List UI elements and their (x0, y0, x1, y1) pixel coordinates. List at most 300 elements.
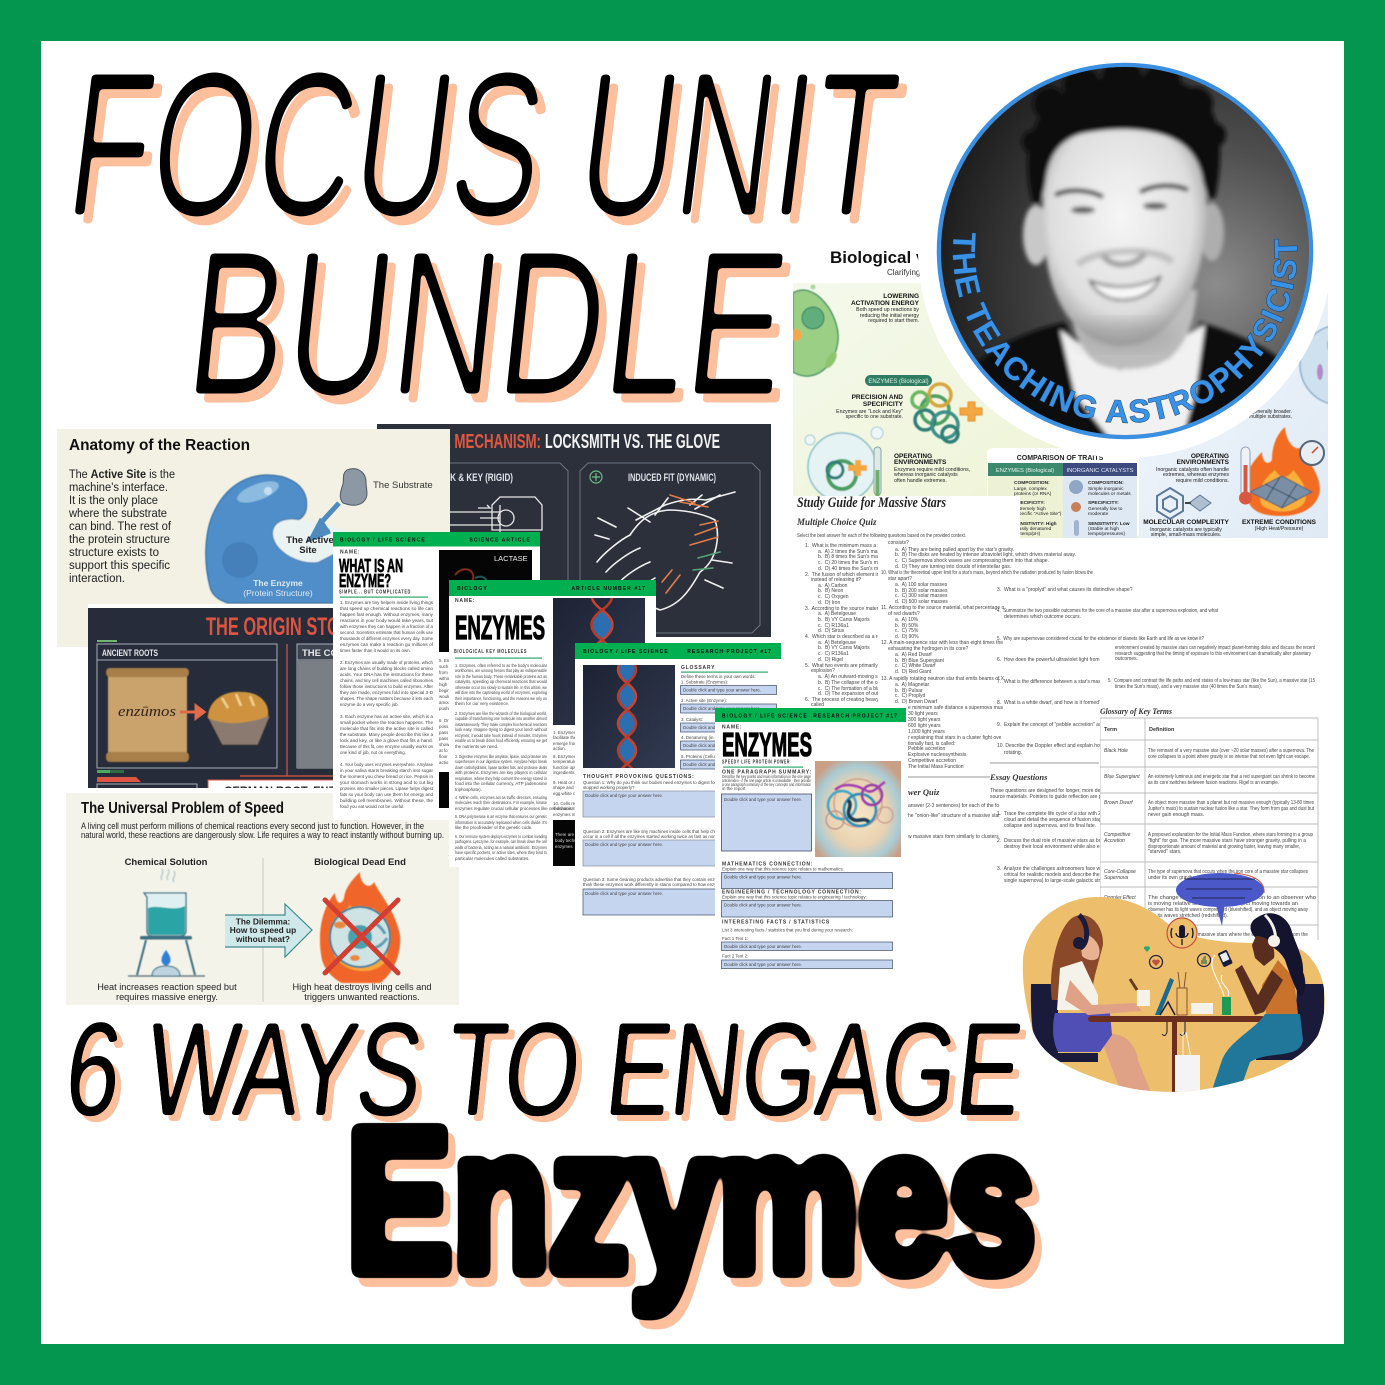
title: FOCUS UNIT: FOCUS UNIT (65, 39, 918, 268)
quiz column 1: c. C) Oxygen (818, 594, 849, 600)
panel: the mechanism locksmith vs the glove (377, 424, 771, 637)
label: extreme conditions: EXTREME CONDITIONS (1242, 519, 1317, 526)
label: molecular complexity (1143, 519, 1229, 538)
image: dna helix (583, 665, 675, 768)
short answer and essay column: 3. What is a "proplyd" and what causes its distinctive shape? (997, 587, 1133, 593)
box: ancient roots: ANCIENT ROOTS (102, 648, 158, 659)
text: operating environments left: often handle extremes. (894, 478, 947, 484)
body text: It is the only place (69, 493, 158, 507)
heading: THE MECHANISM: (424, 431, 541, 453)
table: glossary of key terms: A proposed explanation for the Initial Mass Function, where stars forming in a group (1148, 832, 1313, 838)
second column stub: at fo (439, 748, 448, 753)
summary instructions (722, 774, 811, 791)
quiz column 1: b. B) VY Canis Majoris (818, 645, 870, 651)
header bar (575, 643, 781, 659)
heading: THE ORIGIN STORY (206, 613, 362, 641)
quiz column 2: d. D) 500 solar masses (895, 599, 948, 605)
quiz column 1 (805, 543, 878, 706)
quiz column 2: b. B) 50% (895, 623, 919, 629)
second column stub: temperature and (553, 759, 586, 764)
body text: 4. Your body uses enzymes everywhere. Amylase (340, 762, 434, 767)
body text: interaction. (69, 571, 125, 585)
second column stub: poss (439, 724, 449, 729)
icon: heart badge (1150, 956, 1162, 968)
icon: bread loaf (207, 692, 270, 745)
short answer and essay column: 4. Summarize the two possible outcomes for the core of a massive star after a supernova explosion, and what (997, 608, 1219, 614)
icon: green plus badge (590, 471, 602, 483)
second column stub (439, 658, 451, 765)
summary instructions: in the report (722, 786, 746, 791)
body text: will dive into the captivating world of enzymes, exploring (455, 690, 547, 695)
header bar: ARTICLE NUMBER #17 (571, 586, 646, 592)
body text: second. Scientists estimate that human cells use (340, 630, 434, 635)
right woman face (1252, 936, 1274, 966)
body text: walls of bacteria, acting as a natural antibiotic. Enzymes (455, 845, 548, 850)
label: enzumos: enzūmos (118, 704, 176, 720)
question 3: Question 3: Some cleaning products advertise that they contain enzymes to help them (583, 877, 751, 882)
label: the enzyme: The Enzyme (253, 578, 303, 588)
title: WHAT IS AN (339, 556, 403, 576)
panel: biological vs inorganic catalysts infographic (793, 251, 1328, 538)
question 1: stopped working properly? (583, 785, 635, 790)
table: glossary of key terms: Term (1104, 727, 1117, 733)
short answer and essay column: collapse and supernova, and its final fate. (1004, 823, 1096, 829)
panel: anatomy of the reaction (57, 429, 450, 647)
label: molecular complexity: Inorganic catalysts are typically (1150, 527, 1222, 533)
summary answer box: Double click and type your answer here. (724, 797, 802, 802)
glossary inputs: 5. Proteins (Cellular): (681, 754, 722, 759)
second column stub: 10. Cells regula (553, 801, 584, 806)
short answer and essay column (989, 587, 1219, 884)
table: glossary of key terms: Doppler Effect (1104, 895, 1136, 901)
quiz column 2: e minimum safe distance a supernova mus (908, 705, 1004, 711)
short answer and essay column: 8. What is a white dwarf, and how is it formed? (997, 700, 1102, 706)
table: glossary of key terms: A region in space near massive stars where the extreme radiation from the (1148, 932, 1308, 938)
subtitle: 6 ways to engage: 6 WAYS TO ENGAGE (65, 1001, 1036, 1150)
question 1 (583, 780, 781, 817)
image: lactase: LACTASE (494, 554, 528, 563)
panel: comparison of traits: Simple inorganic (1088, 486, 1124, 492)
text: lowering activation energy: LOWERING (883, 293, 919, 300)
quiz column 2: consists? (888, 540, 909, 546)
quiz column 2: Pebble accretion (908, 746, 945, 752)
quiz column 1: 5. What two events are primarily res (805, 663, 887, 669)
intro text: A living cell must perform millions of chemical reactions every second just to function. However, in the (81, 821, 424, 831)
table: glossary of key terms: Brown Dwarf (1104, 800, 1133, 806)
coffee cup (1130, 979, 1150, 1006)
quiz column 2: a. A) 100 solar masses (895, 582, 948, 588)
decorative bar (97, 640, 117, 642)
quiz column 1: a. A) Carbon (818, 583, 848, 589)
heading (424, 431, 720, 453)
header bar (449, 580, 656, 596)
left woman arm (1065, 980, 1142, 1015)
icon: substrate (340, 469, 367, 505)
quiz column 1: 3. According to the source material, (805, 606, 885, 612)
subheading: multiple choice quiz: Multiple Choice Quiz (796, 517, 877, 527)
second column stub: shape and no (553, 785, 580, 790)
body text: thousands of different enzymes every day. Some (340, 636, 434, 641)
arrow: the dilemma: How to speed up (230, 925, 296, 935)
black callout box: There are (555, 832, 575, 837)
name label: NAME: (722, 724, 742, 730)
body text: shapes. The shape matters because it lets each (340, 696, 434, 701)
arrow (312, 503, 339, 538)
body text: enzyme do a very specific job. (340, 702, 399, 707)
panel: research project 17 glossary (575, 643, 781, 919)
quiz column 1: d. D) Rigel (818, 657, 843, 663)
interesting facts: Double click and type your answer here. (724, 962, 802, 967)
photo: portrait of a man in a dark suit (935, 59, 1315, 450)
body text: them for our very existence. (455, 701, 509, 706)
quiz column 1: b. B) The collapse of the core (818, 680, 885, 686)
quiz column 2: Competitive accretion (908, 758, 956, 764)
eyebrows (1055, 186, 1188, 197)
quiz column 2: 13. A rapidly rotating neutron star that emits beams of X (881, 676, 1005, 682)
panel: comparison of traits: Large, complex (1014, 486, 1047, 492)
quiz column 2: answer (2-3 sentences) for each of the fo (908, 803, 999, 809)
shirt (1060, 325, 1205, 445)
left woman hair back (1051, 915, 1103, 1000)
second column stub: pass (439, 736, 449, 741)
glossary inputs: 4. Denaturing (in biology): (681, 735, 731, 740)
title: FOCUS UNIT (57, 30, 918, 268)
quiz column 1: a. A) An outward-moving sho (818, 674, 884, 680)
glossary inputs: Double click and type your answer here. (683, 688, 761, 692)
box: ancient roots (97, 644, 277, 768)
text: precision and specificity (836, 394, 904, 420)
label: active site (286, 535, 334, 556)
quiz column 2: wer Quiz (908, 787, 940, 797)
quiz column 1: 1. What is the minimum mass a star needs (805, 543, 901, 549)
table: glossary of key terms: Jupiter's mass) to sustain nuclear fusion like a star. They form from gas and dust but (1148, 806, 1315, 812)
body text: enzymes regulate crucial cellular processes like cell division. (455, 806, 573, 811)
second column stub (553, 730, 586, 817)
box: second panel (296, 644, 333, 768)
caption right: triggers unwanted reactions. (304, 992, 420, 1002)
table pole (1172, 1020, 1177, 1095)
table: glossary of key terms: has its waves stretched (redshifted). (1148, 913, 1228, 919)
quiz column 1: b. B) Neon (818, 588, 844, 594)
panel: comparison of traits: (Stable at high (1088, 526, 1119, 532)
icon: thumbs up badge (1198, 954, 1210, 966)
body text: fats so your body can use them for energy and (340, 792, 434, 797)
header bar (715, 708, 906, 722)
table: glossary of key terms: Competitive (1104, 832, 1131, 838)
question 1: Question 1: Why do you think our bodies need enzymes to digest food? What would (583, 780, 747, 785)
table: glossary of key terms: The remnant of a very massive star (over ~20 solar masses) after a supernova. The (1148, 748, 1314, 754)
body text: support this specific (69, 558, 170, 572)
icon: parchment scroll (106, 668, 189, 762)
summary answer box (722, 794, 812, 851)
heading: Anatomy of the Reaction (69, 437, 250, 454)
divider (908, 696, 1220, 777)
table: glossary of key terms: "starved" stars. (1148, 849, 1182, 855)
second column stub: action. (553, 746, 566, 751)
short answer and essay column: cloud and detail the sequence of fusion stages t (1004, 817, 1110, 823)
quiz column 1: 6. The process of creating heavy ele (805, 697, 887, 703)
icon: green cell (790, 284, 839, 376)
body text: machine's interface. (69, 480, 168, 494)
panel: comparison of traits: SPECIFICITY: (1014, 500, 1045, 506)
earphone cable (1212, 955, 1229, 996)
body text: role in the human body. These remarkable proteins act as (455, 674, 548, 679)
quiz column 2: 11. According to the source material, what percentage o (881, 605, 1005, 611)
body text: capable of transforming one molecule into another almost (455, 716, 548, 721)
summary heading: ONE PARAGRAPH SUMMARY: (722, 770, 812, 776)
green rule (723, 766, 803, 768)
quiz column 1: 2. The fusion of which element in a star (805, 572, 894, 578)
arrow: the dilemma: The Dilemma: (236, 916, 290, 926)
body text: where the substrate (68, 506, 167, 520)
body text: food into the cellular currency, ATP (adenosine (455, 781, 548, 786)
quiz column 1: a. A) Betelgeuse (818, 611, 856, 617)
body text: that speed up chemical reactions so life can (340, 606, 434, 611)
icon: beaker on burner (128, 869, 205, 976)
short answer and essay column: source materials. Pointers to guide reflection are provid (990, 794, 1113, 800)
black callout box (553, 820, 577, 866)
short answer and essay column: determines which outcome occurs. (1004, 614, 1081, 620)
image: protein structure (815, 761, 901, 857)
text: lowering activation energy: reducing the initial energy (860, 313, 919, 319)
quiz column 2 (881, 540, 1093, 840)
quiz column 2: b. B) 200 solar masses (895, 588, 948, 594)
icon: bubble with enzyme (805, 427, 883, 501)
body text: building cell membranes. Without these, the (340, 798, 434, 803)
quiz column 2: The Initial Mass Function (908, 764, 964, 770)
table: glossary of key terms: under its own gravity. (1148, 875, 1195, 881)
title: FOCUS UNIT: FOCUS UNIT (57, 30, 910, 259)
speech bubble (1176, 873, 1264, 926)
panel: research project speedy life protein power (715, 708, 906, 973)
table: glossary of key terms: An extremely luminous and energetic star that a red supergiant can shrink to become (1148, 774, 1315, 780)
quiz column 1: b. B) VY Canis Majoris (818, 617, 870, 623)
short answer and essay column: 9. Explain the concept of "pebble accretion" as a n (997, 722, 1110, 728)
glossary inputs: 2. Active site (Enzyme): (681, 698, 727, 703)
second column stub: function optimal (553, 765, 584, 770)
panel: the origin story (88, 604, 333, 788)
left woman top (1057, 961, 1098, 1010)
table: glossary of key terms: The change in frequency of a wave in relation to an observer who (1148, 895, 1316, 901)
second column stub: facilitate the re (553, 735, 582, 740)
arrow: the dilemma: without heat? (235, 934, 290, 944)
body text: in your saliva starts breaking starch into sugar (340, 768, 434, 773)
second column stub: such (439, 664, 449, 669)
body text: instantaneously. They make complex biochemical reactions (455, 722, 548, 727)
smile (1090, 277, 1160, 300)
panel: comparison of traits: (Specific "Active Site") (1014, 511, 1062, 517)
glossary inputs: Double click and type your answer here. (683, 762, 761, 767)
black callout box: enzymes (555, 844, 573, 849)
body text: like the proofreader of the genetic code. (455, 825, 532, 830)
body text: chains, and tiny cell machines called ribosomes (340, 678, 434, 683)
body text: their importance, functioning, and the reasons we rely on (455, 696, 547, 701)
quiz column 1: 4. Which star is described as a red (805, 634, 883, 640)
body text: enable us to break down food efficiently, ensuring we get (455, 738, 548, 743)
quiz column 2: a. A) They are being pulled apart by the star's gravity. (895, 547, 1014, 553)
divider (262, 858, 264, 1002)
question 2: Question 2: Enzymes are like tiny machines inside cells that help chemical reactions (583, 829, 747, 834)
page four: top text and glossary heading (1100, 640, 1325, 940)
body text: workhorses, are unsung heroes that play an indispensable (455, 668, 547, 673)
title: BUNDLE: BUNDLE (177, 209, 798, 438)
quiz column 2: a. A) 10% (895, 617, 919, 623)
left headphones (1079, 915, 1087, 948)
quiz column 1: d. D) Sirius (818, 628, 845, 634)
headline: Enzymes: Enzymes (353, 1095, 1043, 1324)
second column stub: egg white chang (553, 791, 586, 796)
label: extreme conditions (1242, 520, 1316, 531)
arrow (180, 706, 204, 718)
engineering connection (722, 890, 892, 917)
body text: small pocket where the reaction happens. The (340, 720, 434, 725)
icon: thermometer (874, 447, 881, 496)
right headphones (1265, 915, 1280, 947)
body text: proteins into smaller pieces. Lipase helps digest (340, 786, 434, 791)
body text: Because of this fit, one enzyme usually works on (340, 744, 434, 749)
second column stub: 5. En (439, 658, 450, 663)
bar indicators (96, 770, 198, 788)
body text: 3. Each enzyme has an active site, which is a (340, 714, 434, 719)
question 2: Double click and type your answer here. (585, 842, 663, 847)
quiz column 2: c. C) 300 solar masses (895, 593, 948, 599)
second column stub: pass (439, 730, 449, 735)
interesting facts: Double click and type your answer here. (724, 944, 802, 949)
quiz column 2: star apart? (888, 576, 912, 582)
subtitle: BIOLOGICAL KEY MOLECULES (454, 649, 527, 655)
quiz column 2: d. D) Red Giant (895, 669, 932, 675)
instructions: Select the best answer for each of the following questions based on the provided context. (797, 533, 966, 539)
body text: triphosphate). (455, 787, 482, 792)
panel: comparison of traits: molecules or metals (1088, 491, 1131, 497)
glossary inputs: 3. Catalyst: (681, 717, 703, 722)
right woman shirt (1262, 960, 1298, 1014)
title: BUNDLE: BUNDLE (185, 218, 806, 447)
body text: the nutrients we need. (455, 744, 498, 749)
table: glossary of key terms: never gain enough mass. (1148, 812, 1204, 818)
body text: 6. Our immune system deploys enzymes to combat invading (455, 834, 547, 839)
header bar: BIOLOGY / LIFE SCIENCE (722, 714, 808, 720)
body text: 1. Enzymes, often referred to as the body's molecular (455, 663, 547, 668)
panel: comparison of traits: moderate (1088, 511, 1109, 517)
left chair (1031, 984, 1098, 1062)
right woman hair (1250, 913, 1305, 997)
second column stub: 8. Enzymes are (553, 754, 584, 759)
vase (1177, 972, 1187, 1015)
quiz column 2: exhausting the hydrogen in its core? (888, 646, 969, 652)
text: lowering activation energy: Both speed up reactions by (856, 307, 919, 313)
body text: times faster than it would on its own. (340, 648, 411, 653)
table: glossary of key terms: "fight" for gas. The more massive stars have stronger gravity, pulling in a (1148, 838, 1306, 844)
header bar: BIOLOGY (457, 586, 488, 592)
body text: lock and key, or like a glove that fits a hand. (340, 738, 433, 743)
heading: Biological vs. Inorganic Catalysts (830, 248, 1101, 267)
illustration: two people at a table with podcast headphones (1023, 873, 1325, 1095)
arrow: the dilemma (225, 904, 312, 957)
icon: burning cell with red x (320, 872, 400, 983)
icon: lock and key (445, 497, 542, 532)
engineering connection: Explain one way that this science topic relates to engineering / technology: (722, 894, 867, 900)
page four: top text and glossary heading: times the Sun's mass), and a very massive star (40 times the Sun's mass). (1115, 684, 1262, 690)
panel: universal problem of speed (66, 793, 459, 1005)
quiz column 2: r explaining that stars in a cluster fight ove (908, 735, 1002, 741)
green rule (455, 658, 542, 659)
short answer and essay column: rotating. (1004, 750, 1022, 756)
intro text (81, 821, 444, 840)
quiz column 1: d. D) 40 times the Sun's mass (818, 566, 886, 572)
name label: NAME: (340, 550, 360, 556)
green cup (1222, 997, 1231, 1015)
label: active site: The Active (286, 535, 334, 546)
quiz column 1: b. B) 8 times the Sun's mass (818, 554, 883, 560)
label: lock and key: LOCK & KEY (RIGID) (433, 472, 513, 484)
caption right (293, 982, 431, 1002)
second column stub: begin (439, 688, 450, 693)
label: the substrate: The Substrate (373, 480, 433, 491)
body text: have specific pockets, or active sites, where they bind to (455, 850, 547, 855)
body text: reactions in your body would take years, but (340, 618, 434, 623)
subpanel outlines (385, 463, 760, 633)
quiz column 1: called (811, 702, 824, 708)
text: lowering activation energy: ACTIVATION ENERGY (851, 300, 920, 307)
second column stub: ingredients and (553, 770, 584, 775)
second column stub: floor (439, 754, 448, 759)
table: glossary of key terms: is moving relative to the source. An object moving towards an (1148, 901, 1298, 907)
header bar: RESEARCH PROJECT #17 (813, 714, 898, 720)
box: second panel: THE CONNECTION (302, 648, 388, 659)
face (1043, 122, 1207, 346)
table: glossary of key terms: Core-Collapse (1104, 869, 1136, 875)
panel: comparison of traits (987, 448, 1139, 538)
second column stub: 1. Enzymes are (553, 730, 584, 735)
second column stub: actio (439, 760, 449, 765)
text: operating environments right: extremes, whereas enzymes (1163, 472, 1229, 478)
white bag (1175, 1032, 1200, 1095)
panel: comparison of traits: Generally low to (1088, 506, 1123, 512)
second column stub: from (439, 670, 448, 675)
icon: thermometer right (1239, 447, 1252, 504)
text: operating environments right: require mild conditions. (1176, 478, 1229, 484)
left woman legs (1100, 1034, 1152, 1095)
intro text: natural world, these reactions are dangerously slow. Life requires a way to react instantly without burning up. (81, 830, 444, 840)
curved name text: THE TEACHING ASTROPHYSICIST (952, 232, 1298, 424)
body text: food you eat would not be useful. (340, 804, 404, 809)
second column stub: would (439, 694, 451, 699)
second column stub: pushi (439, 706, 450, 711)
quiz column 2: a. A) Red Dwarf (895, 652, 932, 658)
page four: top text and glossary heading: outcomes. (1115, 656, 1138, 662)
neck (1068, 290, 1197, 369)
second column stub: show (439, 742, 450, 747)
left woman skirt (1053, 1013, 1112, 1052)
subtitle: 6 ways to engage: 6 WAYS TO ENGAGE (59, 995, 1030, 1144)
label: enzymes pill (865, 375, 932, 386)
body text: one kind of job, not on everything. (340, 750, 406, 755)
short answer and essay column: single supernova) to large-scale galactic structu (1004, 878, 1110, 884)
panel: comparison of traits: SENSITIVITY: High (1014, 521, 1057, 527)
left woman face (1080, 935, 1100, 960)
body text (455, 663, 573, 861)
portrait badge: the teaching astrophysicist (918, 62, 1328, 458)
page four: top text and glossary heading: research suggesting that the timing of exposure to this environment can dramatically alter planetary (1115, 651, 1311, 657)
second column stub: enzymes must (553, 812, 582, 817)
table: glossary of key terms: An object more massive than a planet but not massive enough (typically 13-80 times (1148, 800, 1314, 806)
body text (340, 600, 434, 809)
body text: particular molecules called substrates. (455, 856, 529, 861)
subtitle: SPEEDY LIFE PROTEIN POWER (722, 760, 790, 766)
quiz column 2: a. A) Magnetar (895, 682, 930, 688)
white halo (918, 44, 1332, 458)
